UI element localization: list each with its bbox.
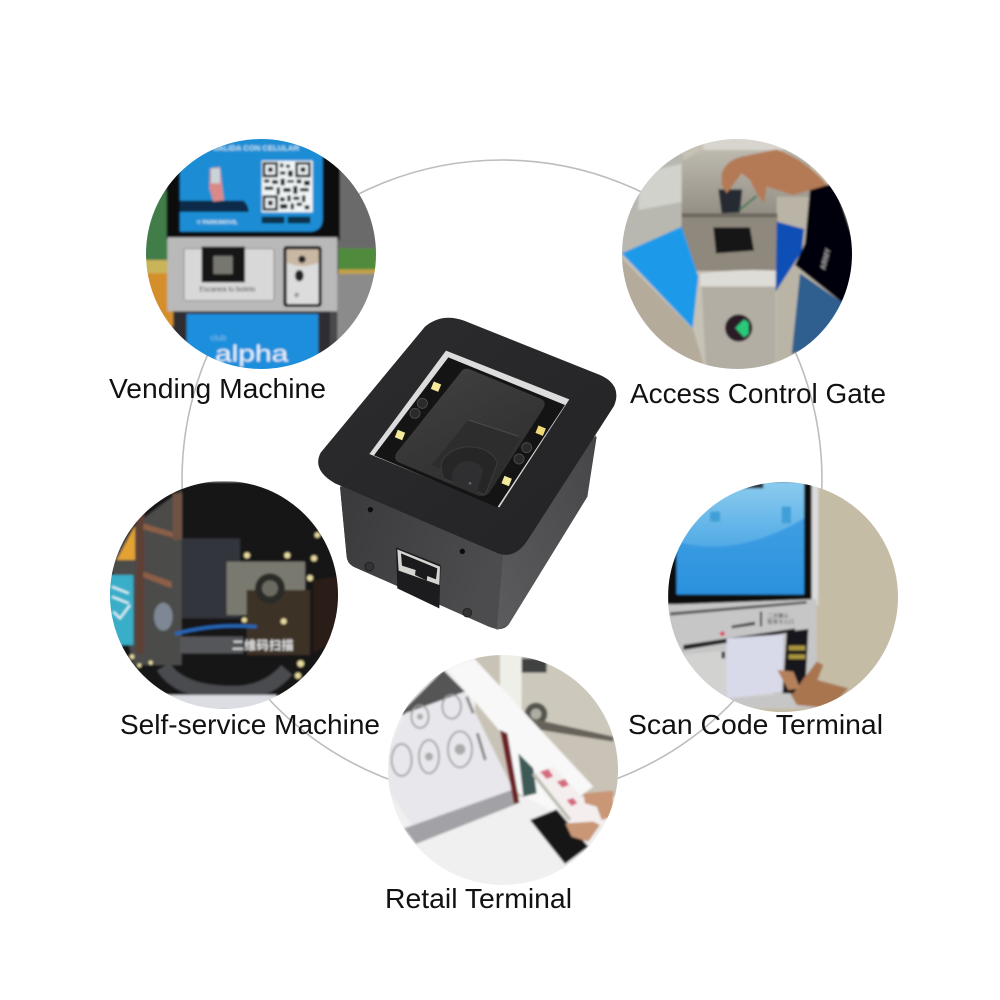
gate body and reader xyxy=(682,213,777,370)
silver scanner panel xyxy=(167,237,337,311)
terminal lower panel: 二次确认 xyxy=(767,612,789,620)
screw holes xyxy=(365,507,472,617)
white diagonal slab xyxy=(472,659,594,800)
alpha banner: alpha xyxy=(215,341,288,367)
chinese screen text: 二维码扫描 xyxy=(232,637,294,652)
blue instruction panel: © PARKIMOVIL xyxy=(197,219,238,226)
red strip and qr xyxy=(500,730,537,804)
alpha banner: club xyxy=(210,333,226,343)
product: QR code scanner module xyxy=(318,318,616,630)
small scanner in hand xyxy=(718,189,757,213)
fingers over phone xyxy=(777,670,800,690)
QR code xyxy=(262,161,313,212)
label: retail terminal: Retail Terminal xyxy=(385,883,572,914)
scanner body xyxy=(340,435,597,630)
grey band xyxy=(404,790,520,844)
terminal screen xyxy=(667,478,812,604)
label: vending machine: Vending Machine xyxy=(109,373,326,404)
photo circle: access control gate xyxy=(620,137,858,373)
scanner reflection xyxy=(227,562,338,655)
green arrow indicator xyxy=(725,314,752,342)
arm and hand xyxy=(722,149,827,203)
person with clothes xyxy=(792,183,858,354)
blue instruction panel: SALIDA CON CELULAR xyxy=(213,144,299,153)
terminal lower panel: 医保卡入口 xyxy=(767,618,794,626)
phone in hand xyxy=(783,629,808,693)
dark corner xyxy=(400,670,465,715)
hand xyxy=(790,661,848,708)
photo circle: scan code terminal xyxy=(663,478,903,715)
outdoor background with van xyxy=(475,653,622,797)
silver scanner panel: Escanea tu boleto xyxy=(199,287,255,294)
blue barrier wings xyxy=(622,222,804,328)
photo circle: retail terminal xyxy=(383,653,623,887)
blue instruction panel xyxy=(180,135,323,232)
terminal lower panel xyxy=(663,599,817,708)
LEDs xyxy=(395,381,546,486)
indicator lights xyxy=(130,532,320,679)
dark gate slot xyxy=(530,809,588,864)
card with pink pattern xyxy=(530,768,578,822)
connecting ring xyxy=(182,160,822,800)
label: scan code terminal: Scan Code Terminal xyxy=(628,709,883,740)
blue arc and base xyxy=(163,626,287,710)
top bezel xyxy=(318,318,616,555)
person with clothes: ARMY xyxy=(818,247,833,271)
teal sign xyxy=(108,575,133,645)
label: access control gate: Access Control Gate xyxy=(630,378,886,409)
alpha banner xyxy=(187,314,318,374)
scan window xyxy=(369,351,569,507)
label: self-service machine: Self-service Machine xyxy=(120,709,380,740)
light panel with icons xyxy=(388,692,513,827)
fingers xyxy=(565,791,613,842)
photo circle: self-service machine xyxy=(107,482,347,712)
photo circle: vending machine xyxy=(146,139,376,369)
ethernet port xyxy=(396,547,441,608)
